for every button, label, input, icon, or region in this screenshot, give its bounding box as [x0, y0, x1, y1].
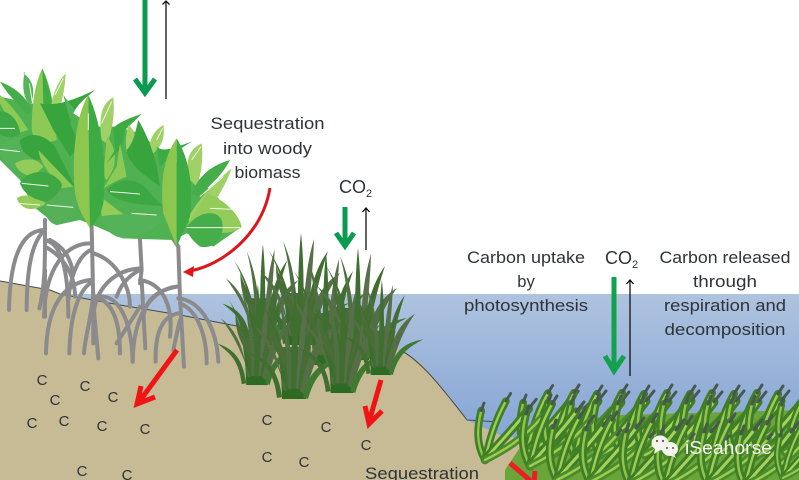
- stored carbon letters: C: [27, 415, 38, 432]
- stored carbon letters: C: [80, 378, 91, 395]
- stored carbon letters: C: [59, 413, 70, 430]
- arrow: seagrass green uptake: [605, 277, 624, 371]
- mangrove roots: [9, 200, 218, 367]
- label: carbon released through respiration and decomposition: Carbon released: [660, 249, 790, 267]
- mangrove canopy: [0, 68, 242, 247]
- arrow: marsh black release: [362, 208, 370, 250]
- watermark: iSeahorse: [652, 436, 772, 458]
- label: carbon released through respiration and decomposition: decomposition: [664, 321, 786, 339]
- stored carbon letters: C: [262, 412, 273, 429]
- water: [60, 294, 799, 480]
- label: sequestration into woody biomass: Sequestration: [210, 115, 324, 133]
- label: carbon uptake by photosynthesis: [464, 249, 588, 315]
- stored carbon letters: C: [37, 372, 48, 389]
- shoreline: [0, 281, 500, 422]
- sediment ground: [0, 281, 799, 480]
- stored carbon letters: C: [262, 449, 273, 466]
- stored carbon letters: C: [140, 421, 151, 438]
- label: sequestration into woody biomass: [210, 115, 324, 182]
- arrow: marsh green uptake: [336, 207, 354, 246]
- arrow: seagrass black release: [626, 280, 634, 376]
- arrow: red mangrove burial: [137, 350, 177, 404]
- label: sequestration into woody biomass: into woody: [223, 140, 313, 158]
- arrow: top black release: [162, 1, 170, 99]
- arrow: red marsh burial: [365, 380, 382, 424]
- stored carbon letters: C: [77, 463, 88, 480]
- stored carbon letters: C: [108, 389, 119, 406]
- stored carbon letters: C: [50, 392, 61, 409]
- arrow: top green CO2 uptake: [135, 0, 155, 93]
- stored carbon letters: [27, 372, 372, 480]
- label: carbon uptake by photosynthesis: Carbon uptake: [467, 249, 585, 267]
- label: carbon uptake by photosynthesis: photosynthesis: [464, 297, 588, 315]
- label: marsh CO2: 2: [366, 188, 372, 200]
- seagrass meadow: [478, 385, 799, 480]
- stored carbon letters: C: [97, 418, 108, 435]
- label: seagrass CO2: 2: [632, 259, 638, 271]
- stored carbon letters: C: [299, 454, 310, 471]
- label: carbon released through respiration and decomposition: respiration and: [664, 297, 786, 315]
- mangrove trees: [0, 68, 242, 367]
- label: carbon released through respiration and decomposition: through: [693, 273, 757, 291]
- label: carbon uptake by photosynthesis: by: [517, 273, 535, 291]
- label: marsh CO2: CO: [339, 177, 366, 197]
- arrow: curved red into woody biomass: [183, 188, 270, 277]
- label: sequestration into woody biomass: biomass: [234, 164, 300, 182]
- icon: wechat bubbles: [652, 436, 678, 458]
- watermark text: iSeahorse: [685, 438, 772, 458]
- stored carbon letters: C: [321, 419, 332, 436]
- label: carbon released through respiration and decomposition: [660, 249, 790, 339]
- stored carbon letters: C: [361, 437, 372, 454]
- seagrass backing: [505, 410, 799, 480]
- label: seagrass CO2: CO: [605, 248, 632, 268]
- arrow: red seagrass burial: [510, 463, 535, 480]
- salt marsh grass: [217, 233, 424, 399]
